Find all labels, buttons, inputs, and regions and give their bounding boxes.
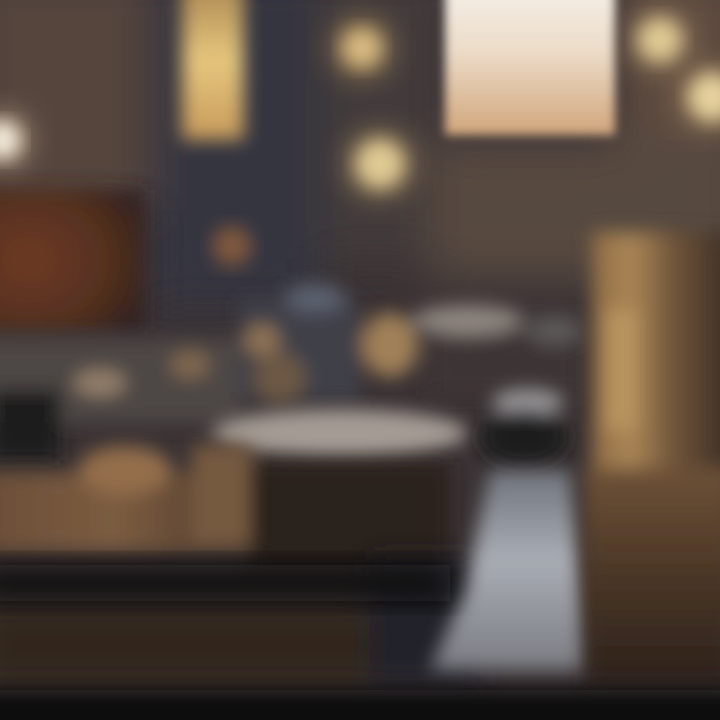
red-brown cabinet — [0, 190, 145, 330]
golden column — [584, 232, 720, 686]
dark table shadow — [0, 565, 450, 601]
round wall lights — [0, 10, 720, 266]
floor reflection — [0, 560, 480, 685]
dark bowl — [480, 389, 568, 466]
white table top — [212, 409, 468, 457]
wooden table — [0, 445, 450, 572]
dishes on the counter — [0, 284, 583, 460]
window — [445, 0, 615, 135]
dark bottom band — [0, 690, 720, 720]
reflective floor strip — [430, 470, 590, 670]
pendant lamp glow — [182, 0, 244, 140]
